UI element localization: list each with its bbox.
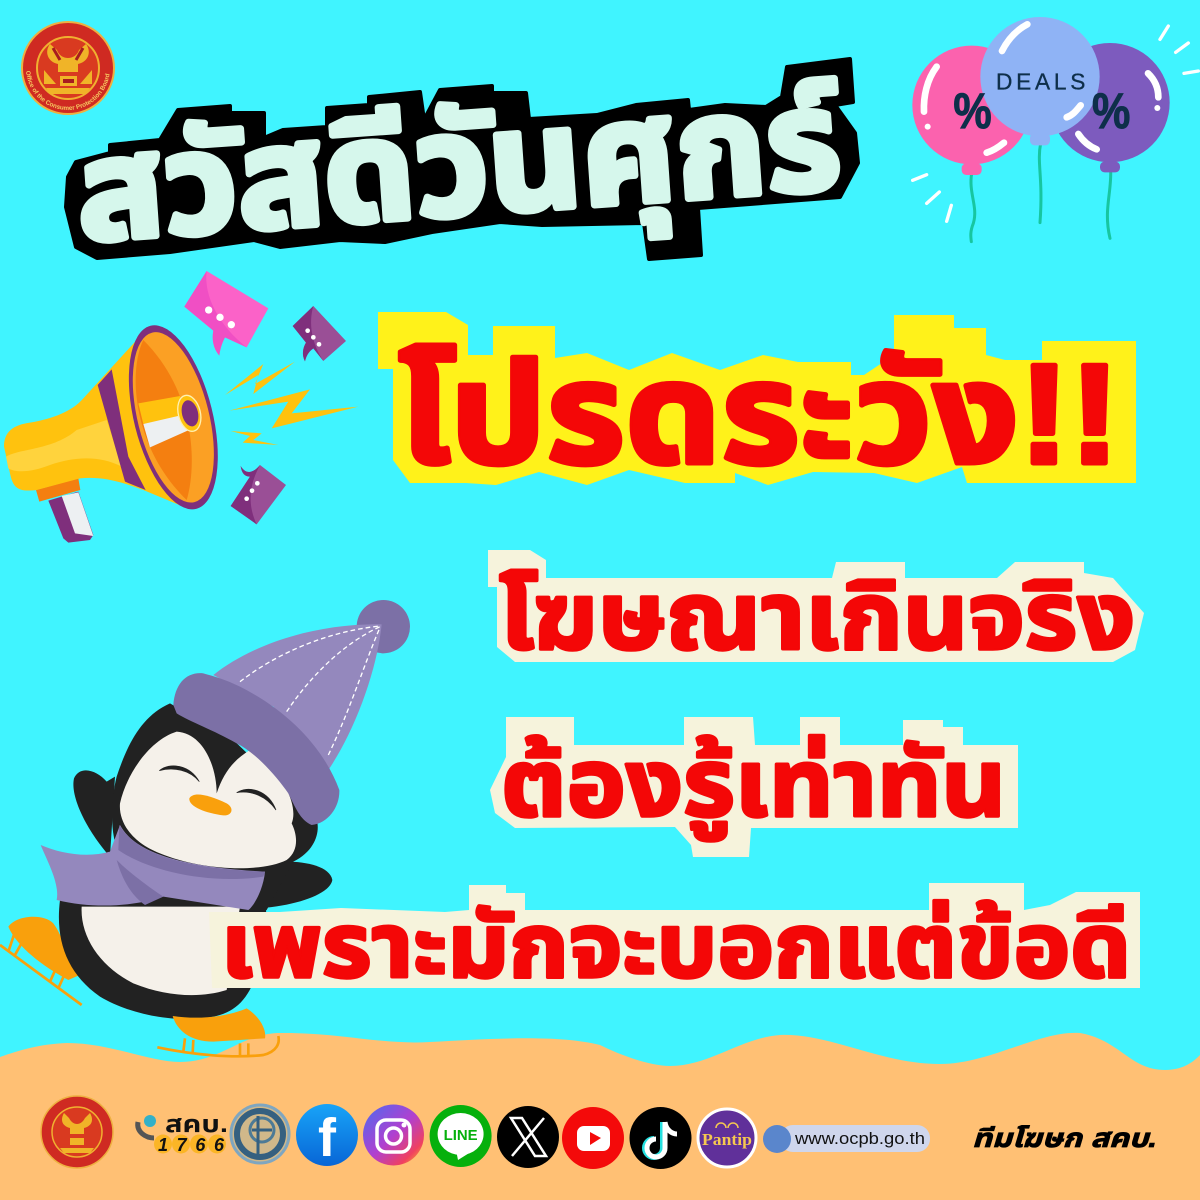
icon: website pill: [763, 1125, 930, 1153]
icon: scarf: [41, 825, 265, 910]
icon: Pantip: [698, 1109, 756, 1167]
megaphone with speech bubbles: [4, 271, 358, 543]
icon: TikTok: [630, 1107, 692, 1169]
icon: YouTube: [562, 1107, 624, 1169]
icon: horn body: [4, 316, 234, 518]
icon: Pantip: Pantip: [702, 1130, 752, 1149]
balloons: deals: %: [1092, 83, 1130, 139]
icon: purple bubble upper: [293, 306, 346, 361]
logo: seal small: [41, 1096, 113, 1168]
icon: instagram: [363, 1104, 424, 1166]
title: สวัสดีวันศุกร์: [71, 61, 846, 278]
icon: hotline 1766: [138, 1111, 228, 1155]
text: line 3: เพราะมักจะบอกแต่ข้อดี: [221, 897, 1131, 997]
icon: OCPB: [231, 1105, 289, 1163]
icon: hotline 1766: สคบ.: [165, 1111, 228, 1138]
icon: flippers: [73, 770, 332, 908]
icon: hotline 1766: 1766: [158, 1135, 225, 1155]
balloons: deals: [912, 17, 1198, 242]
text: line 2: ต้องรู้เท่าทัน: [501, 731, 1006, 841]
icon: skates: [0, 917, 279, 1057]
icon: LINE: [430, 1105, 492, 1167]
icon: X: [497, 1106, 559, 1168]
icon: facebook: f: [318, 1108, 337, 1168]
balloons: deals: DEALS: [996, 68, 1085, 94]
sand ground: [0, 1033, 1200, 1200]
icon: lightning bolts: [225, 362, 358, 445]
icon: pink bubble: [184, 271, 268, 356]
icon: LINE: LINE: [444, 1127, 478, 1144]
logo: consumer protection board seal: [21, 21, 115, 115]
headline: beware: โปรดระวัง!!: [398, 335, 1120, 494]
icon: purple bubble lower: [231, 465, 286, 524]
logo: consumer protection board seal: Office of the Consumer Protection Board: [26, 71, 110, 110]
text: line 1: โฆษณาเกินจริง: [499, 564, 1135, 669]
penguin mascot: [0, 600, 410, 1057]
icon: handle: [36, 478, 93, 543]
icon: hat: [173, 600, 410, 825]
footer: logos and social icons: [41, 1096, 1157, 1169]
icon: facebook: [296, 1104, 358, 1168]
icon: penguin body: [59, 703, 318, 1042]
text: team credit: ทีมโฆษก สคบ.: [972, 1123, 1157, 1153]
icon: website pill: www.ocpb.go.th: [794, 1130, 925, 1148]
balloons: deals: %: [953, 83, 992, 139]
text: line 2: [490, 717, 1018, 857]
